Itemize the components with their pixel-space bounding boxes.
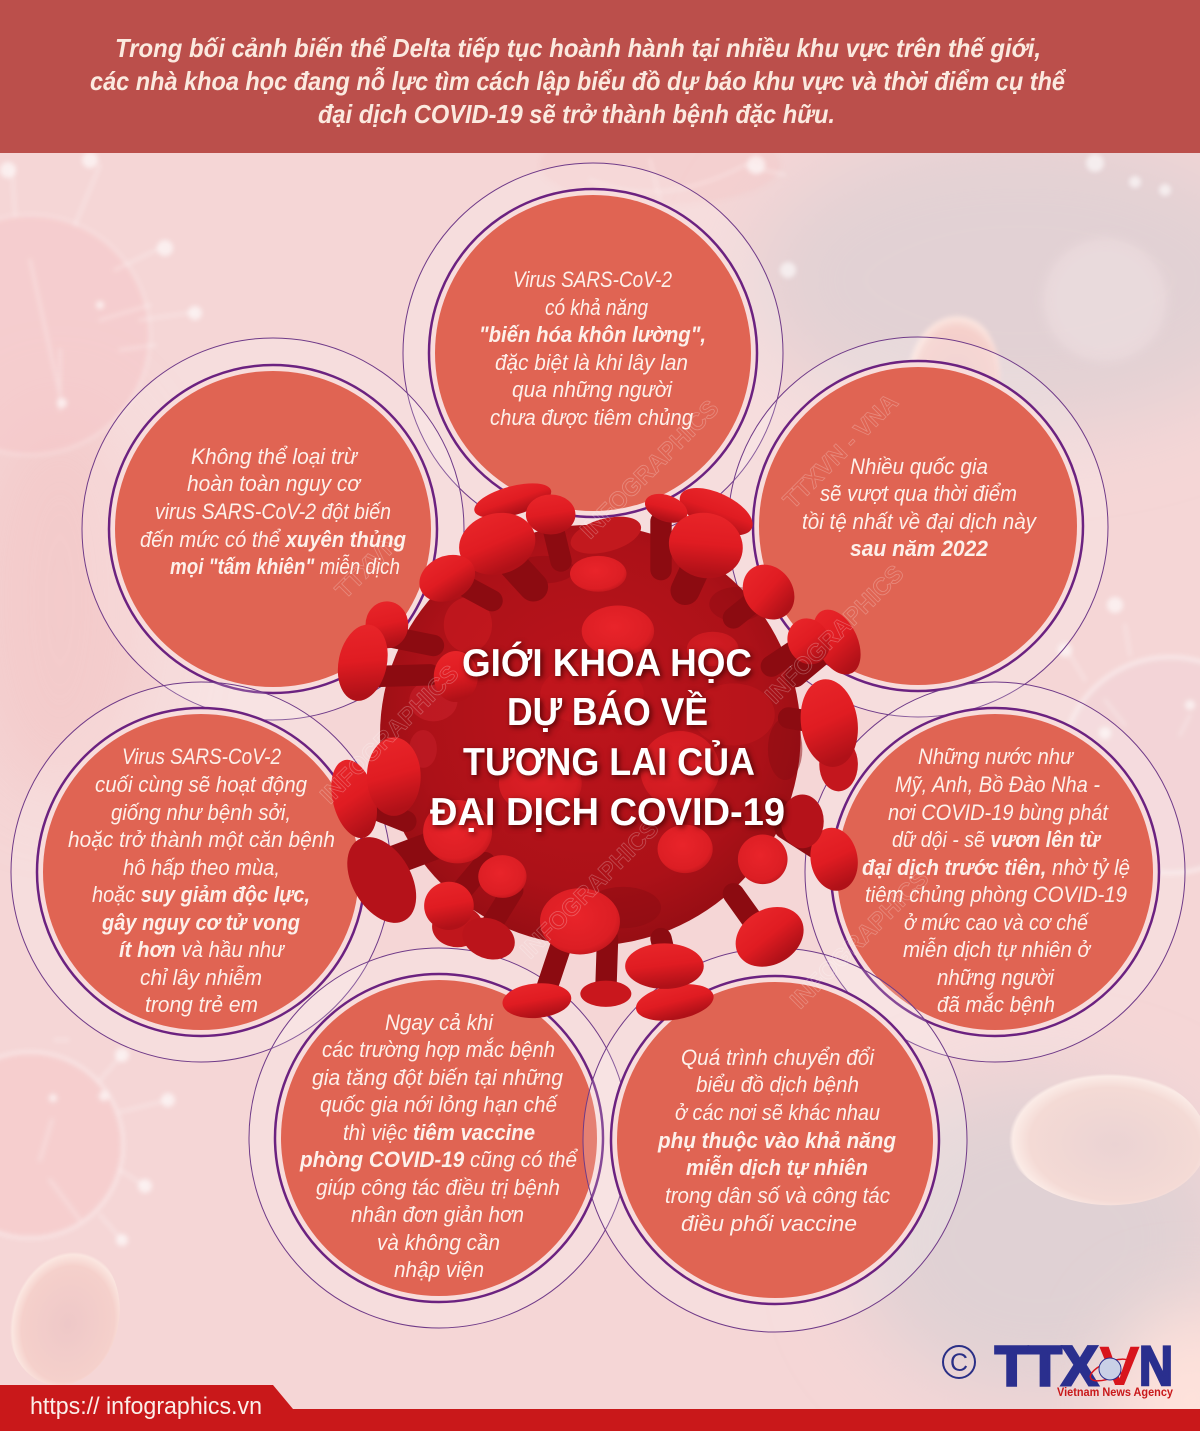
- logo: TTXVN: V: [1099, 1334, 1140, 1397]
- header text: đại dịch COVID-19 sẽ trở thành bệnh đặc hữu.: [318, 99, 835, 129]
- panel: bottom left circle: giúp công tác điều trị bệnh: [316, 1175, 560, 1200]
- panel: bottom left circle: phòng COVID-19 cũng có thể: [299, 1147, 579, 1172]
- background blood cell: lower right: [999, 1062, 1200, 1212]
- panel: top left circle: đến mức có thể xuyên thủng: [140, 527, 407, 552]
- panel: left circle: trong trẻ em: [145, 992, 258, 1017]
- panel: left circle: chỉ lây nhiễm: [140, 965, 262, 990]
- panel: right circle: đại dịch trước tiên, nhờ tỷ lệ: [862, 855, 1130, 880]
- panel: left circle: [11, 682, 391, 1062]
- panel: bottom left circle: quốc gia nới lỏng hạn chế: [320, 1092, 559, 1117]
- panel: top right circle: Nhiều quốc gia: [850, 454, 988, 479]
- logo: TTXVN: Vietnam News Agency: [1057, 1387, 1174, 1399]
- panel: left circle: giống như bệnh sởi,: [111, 800, 291, 825]
- header text: Trong bối cảnh biến thể Delta tiếp tục hoành hành tại nhiều khu vực trên thế giới,: [115, 33, 1041, 63]
- panel: top left circle: [82, 338, 464, 720]
- website url: https:// infographics.vn: [30, 1393, 262, 1420]
- background virus: right: [1058, 597, 1200, 873]
- panel: bottom right circle: biểu đồ dịch bệnh: [696, 1072, 859, 1097]
- panel: top circle: [403, 163, 783, 543]
- panel: left circle: ít hơn và hầu như: [119, 937, 286, 962]
- watermarks: INFOGRAPHICS: [785, 865, 934, 1014]
- panel: bottom left circle: [249, 948, 629, 1328]
- header text: các nhà khoa học đang nỗ lực tìm cách lập biểu đồ dự báo khu vực và thời điểm cụ thể: [90, 66, 1066, 96]
- logo: TTXVN: N: [1139, 1334, 1173, 1397]
- panel: left circle: cuối cùng sẽ hoạt động: [95, 772, 308, 797]
- panel: bottom left circle: gia tăng đột biến tại những: [312, 1065, 564, 1090]
- background blood cell: upper right: [904, 238, 1167, 439]
- title: [430, 641, 785, 834]
- panel: top left circle: virus SARS-CoV-2 đột biến: [155, 499, 391, 524]
- panel: right circle: tiêm chủng phòng COVID-19: [865, 882, 1127, 907]
- watermarks: TTXVN - VNA: [778, 389, 904, 514]
- background virus: lower left: [0, 1040, 175, 1246]
- logo: TTXVN: [943, 1334, 1174, 1399]
- title: GIỚI KHOA HỌC: [462, 641, 752, 685]
- watermarks: INFOGRAPHICS: [515, 815, 664, 964]
- panel: top right circle: [728, 337, 1108, 717]
- panel: right circle: Mỹ, Anh, Bồ Đào Nha -: [895, 772, 1100, 797]
- panel: bottom left circle: các trường hợp mắc bệnh: [322, 1037, 555, 1062]
- panel: bottom right circle: miễn dịch tự nhiên: [686, 1155, 868, 1180]
- panel: top circle: đặc biệt là khi lây lan: [495, 350, 688, 375]
- panel: bottom left circle: và không cần: [377, 1230, 500, 1255]
- panel: left circle: Virus SARS-CoV-2: [122, 744, 281, 769]
- virus body: [380, 525, 802, 945]
- watermarks: TTXVN: [330, 530, 405, 604]
- title: DỰ BÁO VỀ: [507, 690, 708, 734]
- panel: right circle: nơi COVID-19 bùng phát: [888, 800, 1109, 825]
- panel: bottom left circle: nhân đơn giản hơn: [351, 1202, 524, 1227]
- panel: right circle: [805, 682, 1185, 1062]
- background virus: upper left: [0, 152, 202, 455]
- panel: top left circle: mọi "tấm khiên" miễn dịch: [170, 554, 400, 579]
- watermarks: INFOGRAPHICS: [315, 660, 464, 809]
- panel: top circle: Virus SARS-CoV-2: [513, 267, 672, 292]
- panel: top left circle: Không thể loại trừ: [191, 444, 359, 469]
- panel: right circle: Những nước như: [918, 744, 1075, 769]
- panel: bottom right circle: [583, 948, 967, 1332]
- footer bar: [0, 1385, 1200, 1431]
- background virus: upper centre: [540, 125, 1171, 360]
- panel: right circle: ở mức cao và cơ chế: [904, 910, 1090, 935]
- panel: left circle: gây nguy cơ tử vong: [101, 910, 301, 935]
- panel: bottom right circle: ở các nơi sẽ khác nhau: [675, 1100, 880, 1125]
- watermarks: INFOGRAPHICS: [760, 560, 909, 709]
- panel: left circle: hô hấp theo mùa,: [123, 855, 280, 880]
- panel: left circle: hoặc trở thành một căn bệnh: [68, 827, 335, 852]
- panel: top right circle: sẽ vượt qua thời điểm: [820, 481, 1017, 506]
- copyright symbol: [943, 1346, 975, 1378]
- logo: TTXVN: TTX: [995, 1334, 1098, 1397]
- panel: top circle: chưa được tiêm chủng: [490, 405, 694, 430]
- panel: bottom right circle: trong dân số và công tác: [665, 1183, 890, 1208]
- panel: bottom left circle: Ngay cả khi: [385, 1010, 494, 1035]
- panel: bottom left circle: thì việc tiêm vaccine: [343, 1120, 535, 1145]
- panel: bottom right circle: điều phối vaccine: [681, 1211, 857, 1236]
- title: TƯƠNG LAI CỦA: [463, 740, 755, 784]
- panel: right circle: miễn dịch tự nhiên ở: [903, 937, 1092, 962]
- watermarks: INFOGRAPHICS: [575, 395, 724, 544]
- panel: bottom right circle: phụ thuộc vào khả năng: [657, 1128, 897, 1153]
- virus front caps: [423, 556, 788, 954]
- panel: right circle: những người: [937, 965, 1055, 990]
- virus spike caps: [324, 476, 870, 1026]
- header text: [90, 33, 1066, 129]
- panel: top circle: qua những người: [512, 377, 673, 402]
- panel: top circle: có khả năng: [545, 295, 649, 320]
- title: ĐẠI DỊCH COVID-19: [430, 791, 785, 834]
- background blood cell: lower left: [0, 1236, 132, 1396]
- panel: right circle: đã mắc bệnh: [937, 992, 1055, 1017]
- panel: top right circle: tồi tệ nhất về đại dịch này: [802, 509, 1038, 534]
- header band: [0, 0, 1200, 153]
- panel: bottom left circle: nhập viện: [394, 1257, 484, 1282]
- virus stems: [354, 511, 837, 997]
- panel: top circle: "biến hóa khôn lường",: [479, 322, 706, 347]
- watermarks: [315, 389, 934, 1014]
- panel: bottom right circle: Quá trình chuyển đổi: [681, 1045, 875, 1070]
- panel: left circle: hoặc suy giảm độc lực,: [92, 882, 310, 907]
- panel: right circle: dữ dội - sẽ vươn lên từ: [892, 827, 1102, 852]
- copyright symbol: C: [950, 1349, 968, 1377]
- panel: top left circle: hoàn toàn nguy cơ: [187, 471, 362, 496]
- central virus illustration: [324, 476, 870, 1026]
- panel: top right circle: sau năm 2022: [850, 536, 989, 561]
